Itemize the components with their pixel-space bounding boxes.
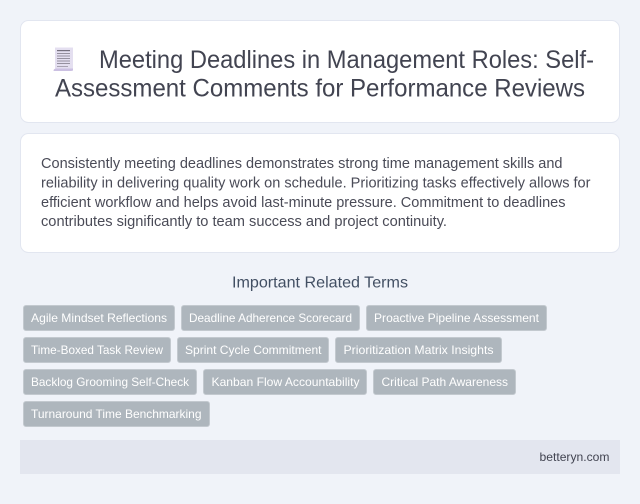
tag [24, 338, 170, 362]
tag: Deadline Adherence Scorecard [189, 311, 352, 325]
tag group: related terms [24, 306, 546, 426]
tag [24, 370, 196, 394]
tag: Time-Boxed Task Review [31, 343, 163, 357]
tag: Critical Path Awareness [382, 375, 508, 389]
tag: Turnaround Time Benchmarking [31, 407, 202, 421]
summary text: reliability in delivering quality work on schedule. Prioritizing tasks effectively allows for [41, 176, 591, 192]
title: Assessment Comments for Performance Reviews [55, 74, 585, 102]
title: Meeting Deadlines in Management Roles: Self- [99, 46, 594, 74]
tag [24, 402, 210, 426]
tag: Proactive Pipeline Assessment [374, 311, 540, 325]
tag [204, 370, 366, 394]
title [55, 46, 594, 102]
tag: Kanban Flow Accountability [212, 375, 360, 389]
tag [336, 338, 502, 362]
footer text: betteryn.com [540, 450, 610, 464]
footer bar [20, 440, 620, 474]
heading: important related terms: Important Related Terms [232, 274, 408, 292]
tag [178, 338, 328, 362]
tag: Prioritization Matrix Insights [344, 343, 494, 357]
tag: Backlog Grooming Self-Check [31, 375, 190, 389]
summary text: contributes significantly to team success and project continuity. [41, 214, 447, 230]
tag [374, 370, 516, 394]
summary text: efficient workflow and helps avoid last-minute pressure. Commitment to deadlines [41, 195, 566, 211]
panel: title card [20, 20, 620, 122]
panel: summary card [20, 134, 620, 252]
tag [24, 306, 174, 330]
summary text [41, 156, 591, 230]
tag [366, 306, 546, 330]
tag: Agile Mindset Reflections [31, 311, 167, 325]
summary text: Consistently meeting deadlines demonstrates strong time management skills and [41, 156, 562, 172]
icon: paper scroll [54, 48, 73, 71]
tag [182, 306, 360, 330]
tag: Sprint Cycle Commitment [185, 343, 322, 357]
